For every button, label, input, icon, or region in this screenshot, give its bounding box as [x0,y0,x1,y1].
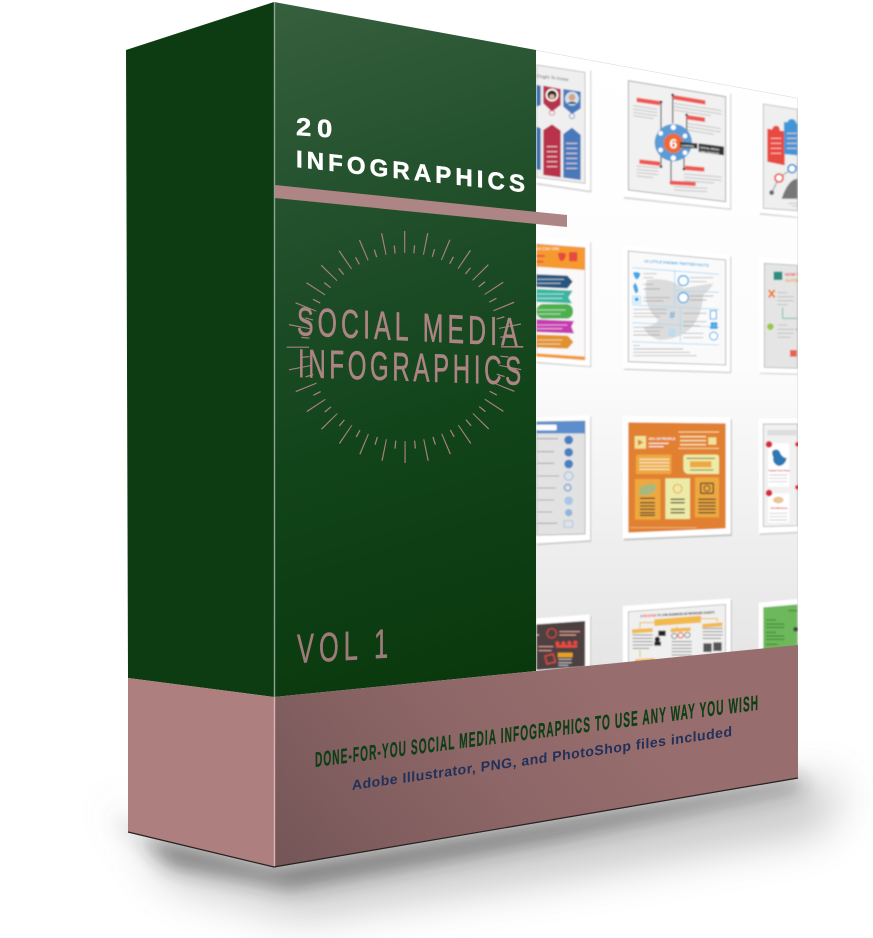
thumbnails upper rows [537,62,801,375]
accent bar [275,185,567,227]
thumbnail: red and blue panels [759,97,797,218]
box edges [128,2,798,867]
thumbnail: dark statistics [537,614,591,673]
thumbnail: how to automate: AUTOM [785,278,801,283]
thumbnail: blue icon list [537,415,591,545]
left side face: green [126,2,274,697]
thumbnail: orange social ribbons [537,237,591,367]
cover title: social media: SOCIAL MEDIA [297,300,518,356]
cover title: infographics: INFOGRAPHICS [298,341,521,393]
thumbnail: how to automate: HOW T [785,272,800,277]
thumbnail: orange social ribbons: es Can Use [537,246,560,251]
left side face: pink band [128,678,274,867]
thumbnail: twitter facts: 10 LITTLE KNOWN TWITTER FACTS [644,259,709,268]
thumbnails lower rows [537,415,800,673]
thumbnail: six careers wheel: SOCIAL MEDIA [700,145,720,152]
thumbnail: branding tips [759,418,800,535]
front cover panel [274,2,536,697]
tagline: DONE-FOR-YOU SOCIAL MEDIA INFOGRAPHICS TO USE ANY WAY YOU WISH [315,692,758,772]
thumbnail: people profiles: Ought To Know [537,73,569,82]
thumbnail: six careers wheel: HAS CREATED [700,149,719,156]
thumbnail: branding tips: Get Influencers [771,507,788,510]
volume label: VOL 1 [297,622,388,673]
heading: 20: 20 [296,112,332,143]
ground shadow [105,778,845,915]
thumbnail: six careers wheel [623,73,731,210]
back wall with infographic thumbnails [536,50,801,690]
thumbnail: business networking events [623,598,732,665]
thumbnail: six careers wheel: 6 [669,135,677,151]
heading: infographics: INFOGRAPHICS [296,146,525,198]
thumbnail: twitter facts [623,245,731,373]
thumbnail: business networking events: 5 REASONS TO JOIN BUSINESS NETWORKING EVENTS [641,610,715,618]
file formats line: Adobe Illustrator, PNG, and PhotoShop files included [352,723,732,793]
thumbnail: how to automate [760,260,798,376]
thumbnail: green panel [759,599,798,653]
thumbnail: six careers wheel: CAREERS [681,143,694,148]
thumbnail: orange visuals: 40% OF PEOPLE [649,437,676,441]
front bottom band [274,645,798,867]
thumbnail: people profiles [537,62,591,193]
thumbnail: branding tips: Feature Your Posts [769,470,791,473]
thumbnail: twitter facts: # [670,311,676,322]
sunburst badge [298,242,512,452]
thumbnail: orange visuals [623,416,732,541]
